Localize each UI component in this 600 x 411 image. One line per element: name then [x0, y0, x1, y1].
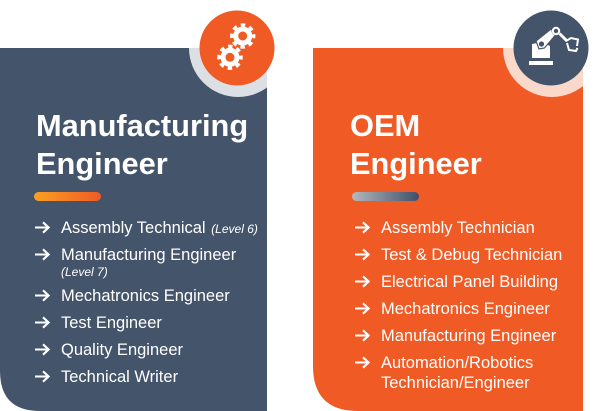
list: OEM roles [355, 219, 562, 392]
list item: Manufacturing Engineer [35, 246, 237, 279]
heading: OEM Engineer: OEM [350, 108, 420, 143]
icon: robot arm [514, 10, 588, 86]
icon: gears [200, 10, 274, 86]
list item: Manufacturing Engineer: (Level 7) [61, 265, 108, 279]
ring behind robot icon [503, 48, 583, 97]
accent bar: grey gradient [352, 192, 419, 201]
list item: Manufacturing Engineer: Manufacturing Engineer [381, 327, 557, 345]
list item: Test & Debug Technician: Test & Debug Technician [381, 246, 562, 264]
panel: Manufacturing Engineer [0, 0, 287, 411]
list item: Automation/Robotics Technician/Engineer: Automation/Robotics [381, 354, 533, 372]
list item: Assembly Technician: Assembly Technician [381, 219, 535, 237]
list item: Manufacturing Engineer: Manufacturing Engineer [61, 246, 237, 264]
list item: Assembly Technical: Assembly Technical (Level 6) [61, 219, 258, 237]
list item: Mechatronics Engineer: Mechatronics Engineer [61, 287, 230, 305]
ring behind gears icon [189, 48, 267, 97]
list item: Test Engineer: Test Engineer [61, 314, 162, 332]
list item: Mechatronics Engineer: Mechatronics Engineer [381, 300, 550, 318]
heading: Manufacturing Engineer: Manufacturing [36, 108, 248, 143]
heading: Manufacturing Engineer: Engineer [36, 146, 168, 181]
panel: OEM Engineer [313, 0, 600, 411]
heading: OEM Engineer: Engineer [350, 146, 482, 181]
list item: Automation/Robotics Technician/Engineer: Technician/Engineer [381, 374, 530, 392]
list item: Quality Engineer: Quality Engineer [61, 341, 183, 359]
list item: Electrical Panel Building: Electrical Panel Building [381, 273, 558, 291]
list item: Technical Writer: Technical Writer [61, 368, 179, 386]
list: manufacturing roles [35, 219, 258, 386]
list item: Automation/Robotics Technician/Engineer [355, 354, 533, 392]
accent bar: orange gradient [34, 192, 101, 201]
